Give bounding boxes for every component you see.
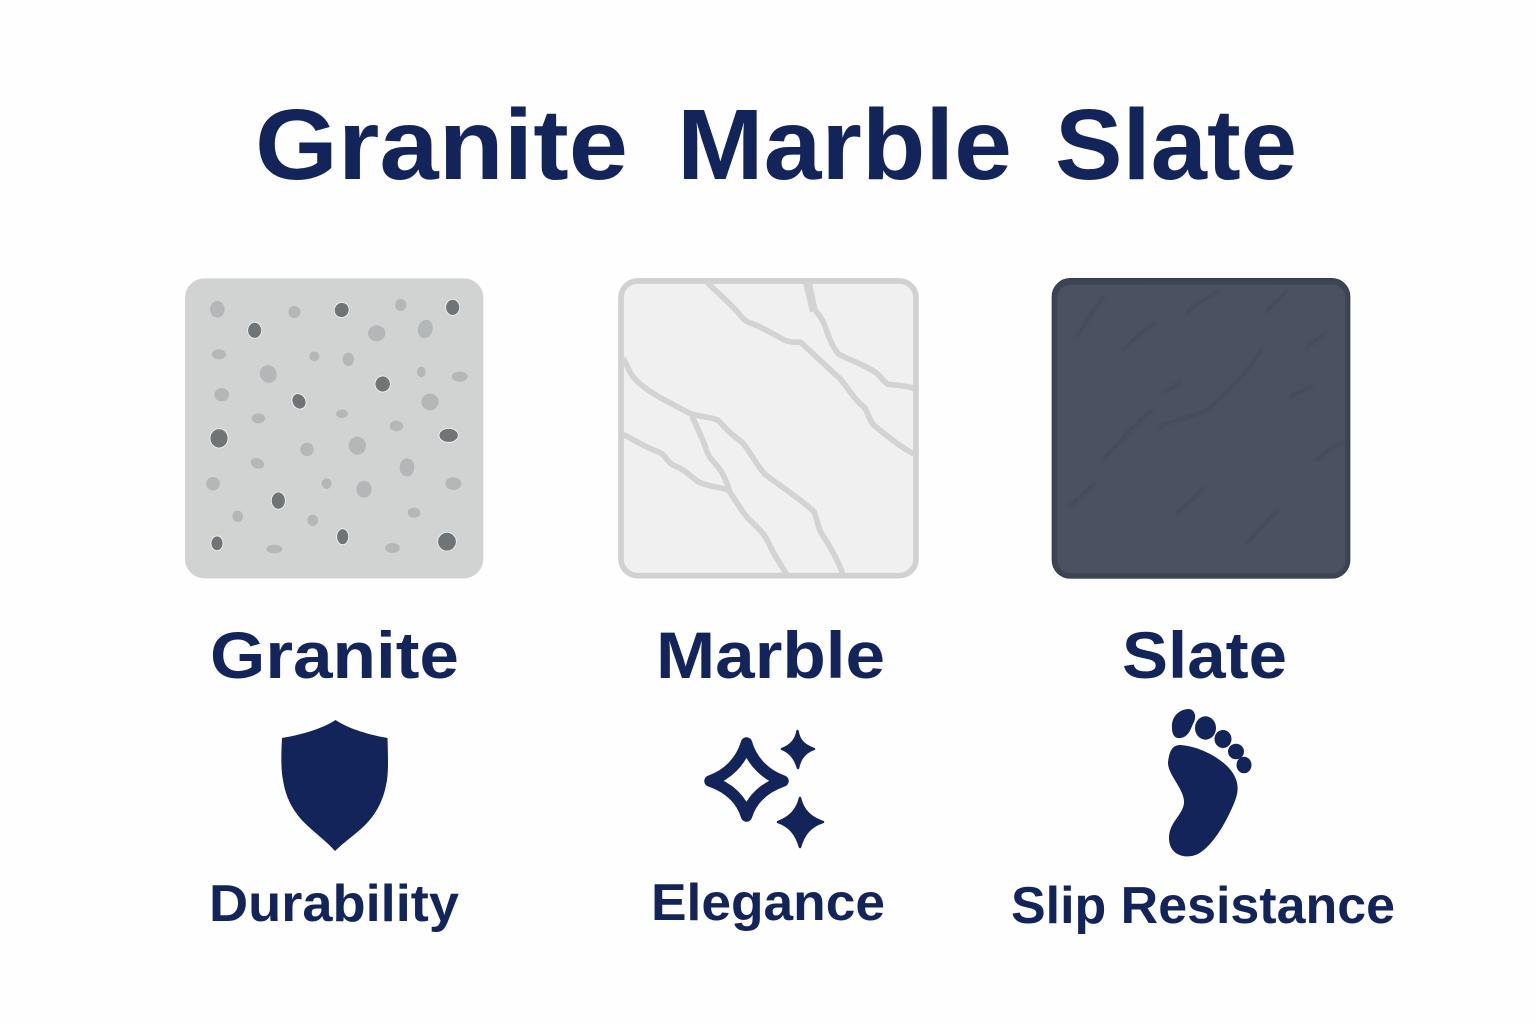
slip resistance label: Slip Resistance	[1011, 877, 1395, 935]
icon: footprint	[1168, 709, 1252, 856]
icon: shield	[281, 720, 388, 851]
title: Slate	[1055, 89, 1297, 201]
panel: granite	[185, 278, 483, 933]
marble swatch	[621, 281, 916, 576]
granite swatch	[185, 278, 483, 578]
slate swatch	[1052, 278, 1350, 578]
icon: sparkles	[710, 731, 823, 847]
title	[255, 89, 1297, 201]
panel: slate	[1011, 278, 1395, 935]
title: Granite	[255, 89, 628, 201]
durability label: Durability	[209, 875, 459, 933]
elegance label: Elegance	[651, 874, 885, 932]
marble label: Marble	[656, 618, 885, 692]
panel: marble	[621, 281, 916, 932]
granite label: Granite	[210, 618, 459, 692]
title: Marble	[677, 89, 1012, 201]
slate label: Slate	[1122, 618, 1287, 692]
